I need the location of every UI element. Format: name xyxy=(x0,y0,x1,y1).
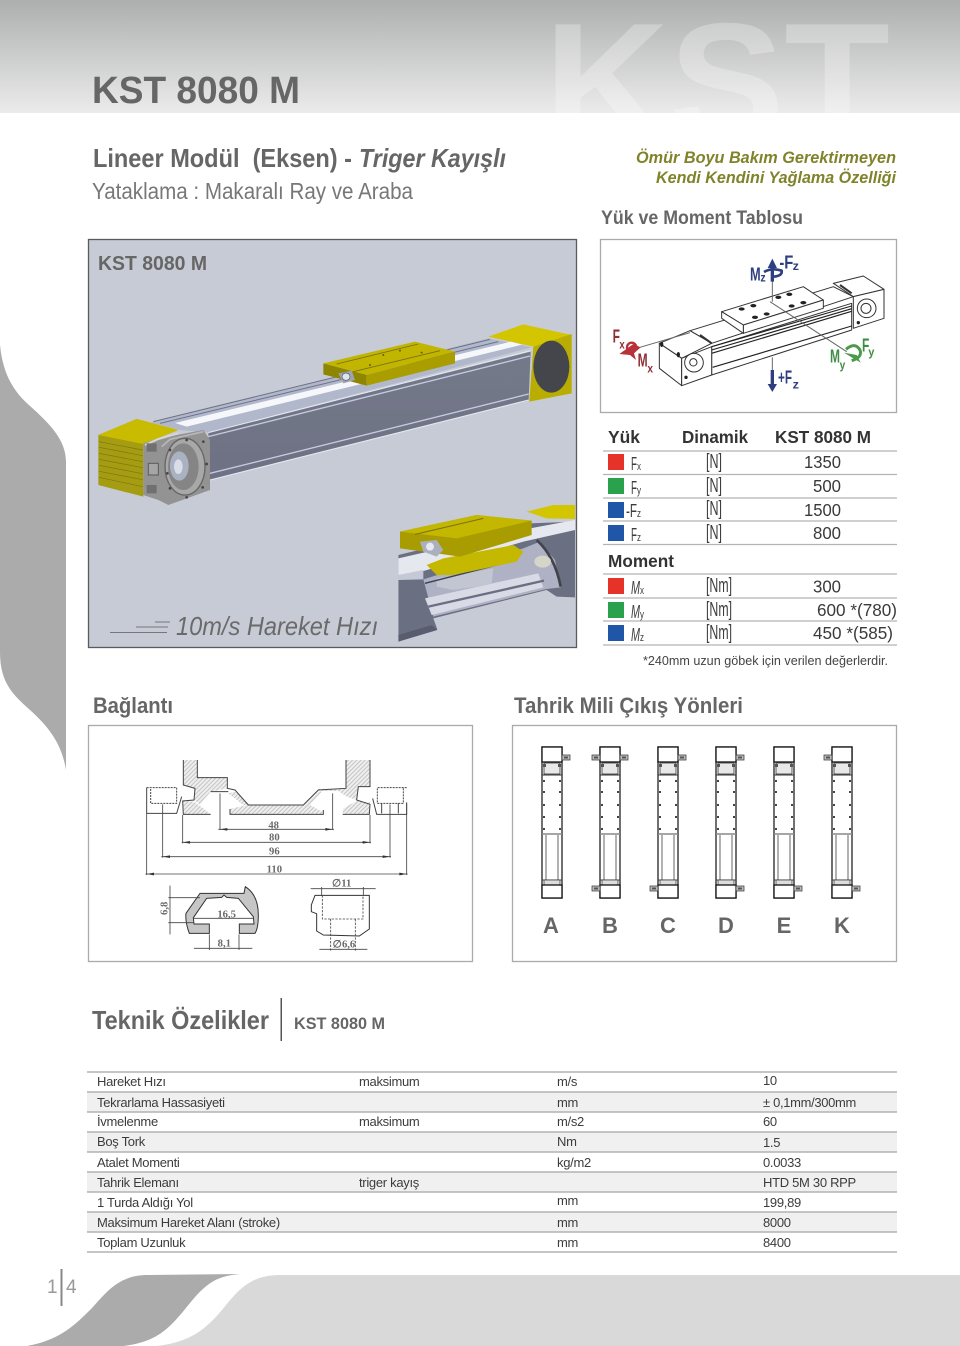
variant K xyxy=(824,747,860,938)
arrow: -Fz and Mz: z xyxy=(760,271,766,285)
axis lines xyxy=(640,280,847,372)
subtitle: Triger Kayışlı xyxy=(359,143,506,173)
row Mx: [Nm] xyxy=(706,575,732,597)
row Fx: [N] xyxy=(706,451,722,473)
row: inertia: Atalet Momenti xyxy=(97,1155,180,1170)
page number xyxy=(47,1269,77,1306)
row: travel per turn: 1 Turda Aldığı Yol xyxy=(97,1195,193,1210)
subtitle xyxy=(93,143,506,173)
arrow: Fx and Mx: x xyxy=(619,337,625,351)
variant E: E xyxy=(777,913,791,938)
row My: 600 *(780) xyxy=(817,600,897,620)
arrow: Fy and My xyxy=(830,335,875,372)
panel title: KST 8080 M xyxy=(98,253,207,275)
row: travel per turn xyxy=(97,1193,801,1210)
arrow: -Fz and Mz: z xyxy=(793,259,799,273)
row Fx: 1350 xyxy=(804,452,841,472)
row Fz: F xyxy=(631,525,637,545)
variant E xyxy=(774,747,802,938)
load and moment table xyxy=(603,427,897,668)
speed caption: 10m/s Hareket Hızı xyxy=(176,611,378,641)
row: idle torque xyxy=(97,1134,780,1150)
dimension lines xyxy=(145,793,408,875)
row Fy: 500 xyxy=(813,476,841,496)
variant D: D xyxy=(718,913,734,938)
arrow: -Fz and Mz: -F xyxy=(779,252,793,273)
row My: M xyxy=(631,602,640,622)
panel: connection dimensions xyxy=(88,726,472,962)
row My: y xyxy=(640,609,644,621)
arrow: Fy and My: y xyxy=(868,345,875,359)
row Mz: z xyxy=(640,632,644,644)
row: speed: m/s xyxy=(557,1074,578,1089)
arrow: Fy and My: F xyxy=(862,335,869,356)
row: drive element: HTD 5M 30 RPP xyxy=(763,1175,856,1190)
table header: Yük xyxy=(608,427,640,447)
technical specs heading: Teknik Özelikler xyxy=(92,1005,269,1035)
row: speed: maksimum xyxy=(359,1074,419,1089)
title: KST 8080 M xyxy=(92,70,300,112)
variant A xyxy=(542,747,570,938)
T-slot profile: 8,1 xyxy=(218,939,231,950)
maintenance note xyxy=(636,148,897,187)
row: repeatability xyxy=(97,1095,856,1110)
row Fx xyxy=(608,451,841,474)
variant K: K xyxy=(834,913,850,938)
T-slot profile: 16,5 xyxy=(217,909,236,920)
technical specs heading xyxy=(92,998,385,1041)
table header: KST 8080 M xyxy=(775,427,871,447)
arrow: Fx and Mx: M xyxy=(638,350,648,371)
table header: Dinamik xyxy=(682,427,748,447)
arrow: +Fz: z xyxy=(793,377,799,391)
row: travel per turn: mm xyxy=(557,1193,578,1208)
arrow: Fx and Mx: F xyxy=(613,326,620,347)
row Mz: 450 *(585) xyxy=(813,623,893,643)
row My xyxy=(608,599,897,622)
row -Fz: [N] xyxy=(706,498,722,520)
module line drawing xyxy=(659,276,884,386)
left side decorative shape xyxy=(0,345,66,770)
row: drive element xyxy=(97,1175,856,1190)
arrow: -Fz and Mz: M xyxy=(750,264,761,285)
dimension values: 48 xyxy=(268,820,279,831)
T-slot profile xyxy=(159,886,258,950)
cutaway inset render xyxy=(398,505,575,642)
right yellow cap xyxy=(488,324,572,347)
row: speed xyxy=(97,1073,777,1089)
carriage xyxy=(323,342,455,375)
counterbore profile: ∅6,6 xyxy=(333,939,356,951)
dimension values: 110 xyxy=(267,864,282,875)
row Fz xyxy=(608,522,841,545)
row: total length: Toplam Uzunluk xyxy=(97,1235,186,1250)
load table heading: Yük ve Moment Tablosu xyxy=(601,208,803,229)
arrow: +Fz: +F xyxy=(778,366,792,387)
row Mz xyxy=(608,622,893,645)
T-slot profile: 6,8 xyxy=(159,902,170,915)
moment heading: Moment xyxy=(608,551,674,571)
row Mx: M xyxy=(631,578,640,598)
footnote: *240mm uzun göbek için verilen değerlerdir. xyxy=(643,654,888,668)
table header xyxy=(608,427,871,447)
row: speed: Hareket Hızı xyxy=(97,1074,166,1089)
speed lines xyxy=(110,622,170,632)
footer wave shapes xyxy=(27,1274,960,1346)
row Fy: [N] xyxy=(706,475,722,497)
arrow: +Fz xyxy=(768,366,799,392)
row: idle torque: Nm xyxy=(557,1134,577,1149)
page number: 1 xyxy=(47,1277,58,1298)
row Fz: z xyxy=(637,532,641,544)
row: acceleration: maksimum xyxy=(359,1114,419,1129)
arrow: -Fz and Mz xyxy=(750,252,799,285)
variant B xyxy=(592,747,628,938)
row: repeatability: mm xyxy=(557,1095,578,1110)
row Fz: [N] xyxy=(706,522,722,544)
technical specs table xyxy=(87,1072,897,1252)
row: acceleration: 60 xyxy=(763,1114,777,1129)
row: repeatability: ± 0,1mm/300mm xyxy=(763,1095,856,1110)
technical specs heading: KST 8080 M xyxy=(294,1014,385,1033)
counterbore profile: ∅11 xyxy=(332,878,351,890)
row: acceleration xyxy=(97,1114,777,1129)
page number: 4 xyxy=(66,1277,77,1298)
row: stroke: 8000 xyxy=(763,1215,791,1230)
row -Fz xyxy=(608,498,841,521)
row: stroke xyxy=(97,1215,791,1230)
dimension values xyxy=(267,820,282,875)
variant D xyxy=(716,747,744,938)
left end plate xyxy=(143,430,210,505)
row: total length: mm xyxy=(557,1235,578,1250)
row Mx: x xyxy=(640,585,644,597)
row: drive element: Tahrik Elemanı xyxy=(97,1175,179,1190)
maintenance note: Ömür Boyu Bakım Gerektirmeyen xyxy=(636,148,896,167)
row Fz: 800 xyxy=(813,523,841,543)
variant B: B xyxy=(602,913,618,938)
dimension values: 80 xyxy=(269,833,280,844)
panel: drive shaft directions xyxy=(512,726,896,962)
row Mx xyxy=(608,575,841,598)
row -Fz: z xyxy=(637,508,641,520)
header band xyxy=(0,0,960,113)
row: total length xyxy=(97,1235,791,1250)
row: idle torque: 1.5 xyxy=(763,1135,780,1150)
row: acceleration: İvmelenme xyxy=(97,1114,158,1129)
variant C: C xyxy=(660,913,676,938)
panel: force diagram xyxy=(600,240,896,412)
row: repeatability: Tekrarlama Hassasiyeti xyxy=(97,1095,225,1110)
row -Fz: -F xyxy=(626,501,637,521)
row: inertia xyxy=(97,1155,801,1170)
row: inertia: kg/m2 xyxy=(557,1155,591,1170)
row Fy: y xyxy=(637,485,641,497)
row: speed: 10 xyxy=(763,1073,777,1088)
row Fx: x xyxy=(637,461,641,473)
row Fx: F xyxy=(631,454,637,474)
row: drive element: triger kayış xyxy=(359,1175,420,1190)
bearing text: Yataklama : Makaralı Ray ve Araba xyxy=(92,178,413,204)
subtitle: Lineer Modül (Eksen) - xyxy=(93,143,352,173)
row Fy xyxy=(608,475,841,498)
panel: 3D render xyxy=(88,240,576,648)
arrow: Fy and My: M xyxy=(830,346,840,367)
maintenance note: Kendi Kendini Yağlama Özelliği xyxy=(656,168,897,187)
cross-section drawing xyxy=(145,760,408,875)
arrow: Fx and Mx: x xyxy=(647,362,653,376)
dimension values: 96 xyxy=(269,847,280,858)
row: inertia: 0.0033 xyxy=(763,1155,801,1170)
row: total length: 8400 xyxy=(763,1235,791,1250)
row: idle torque: Boş Tork xyxy=(97,1134,146,1149)
row: stroke: Maksimum Hareket Alanı (stroke) xyxy=(97,1215,280,1230)
row -Fz: 1500 xyxy=(804,500,841,520)
module render xyxy=(98,324,572,505)
connection heading: Bağlantı xyxy=(93,693,173,718)
variant A: A xyxy=(543,913,559,938)
row: acceleration: m/s2 xyxy=(557,1114,584,1129)
row Mx: 300 xyxy=(813,576,841,596)
left yellow cap xyxy=(98,419,178,497)
counterbore profile xyxy=(311,878,376,952)
row: stroke: mm xyxy=(557,1215,578,1230)
variant C xyxy=(650,747,686,938)
row Fy: F xyxy=(631,478,637,498)
row Mz: M xyxy=(631,625,640,645)
row: travel per turn: 199,89 xyxy=(763,1195,801,1210)
drive direction heading: Tahrik Mili Çıkış Yönleri xyxy=(514,693,743,718)
arrow: Fy and My: y xyxy=(840,358,846,372)
arrow: Fx and Mx xyxy=(613,326,653,376)
row My: [Nm] xyxy=(706,599,732,621)
row Mz: [Nm] xyxy=(706,622,732,644)
